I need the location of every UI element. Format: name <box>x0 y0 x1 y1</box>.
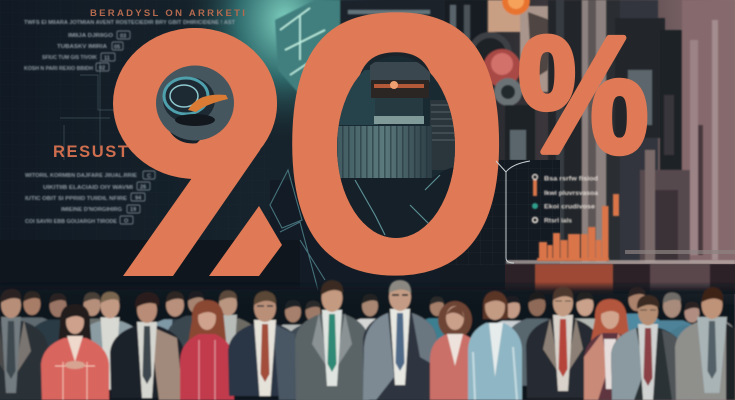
text block: lower list: O <box>124 218 129 224</box>
person: woman in coral jacket <box>41 304 109 400</box>
text block: lower list: 19 <box>130 207 136 213</box>
background row of people <box>1 287 720 392</box>
text block: upper list: 11 <box>104 56 110 62</box>
city towers on the right <box>548 0 735 262</box>
text block: lower list: 26 <box>140 184 146 190</box>
big number 9.0% <box>113 12 648 276</box>
legend: Ikwi pluvrsvasoa <box>544 190 599 197</box>
chart bracket line <box>496 161 530 263</box>
text block: lower list <box>25 171 155 225</box>
text block: upper list: TUBASKV IMIRIA <box>57 44 107 50</box>
person: man at right edge <box>675 287 735 400</box>
decimal point <box>209 206 282 276</box>
text block: upper list: KOSH N PARI REXIO BBIDH <box>24 66 93 72</box>
person: man with glasses and red tie <box>228 291 302 400</box>
text block: upper list: SFIUC TUM GIS TIVOIK <box>42 55 97 61</box>
person: man left edge <box>0 289 48 400</box>
text block: upper list: 05 <box>114 44 120 50</box>
person: man with green tie <box>295 280 369 400</box>
machine window in the 0 <box>337 56 455 238</box>
text block: upper list: 02 <box>99 66 105 72</box>
person: man in tan and black suit <box>110 292 184 400</box>
person: man in grey suit <box>611 295 685 400</box>
legend: Rtsrl ials <box>544 218 573 224</box>
text block: lower list: IUTIC OBIT SI PPRIID TUIIDIL NFIRE <box>25 196 127 202</box>
heading: market: BERADYSL ON ARRKETI <box>90 8 247 19</box>
9 diagonal leg <box>123 100 277 276</box>
robot machinery at top centre <box>275 0 552 165</box>
legend: Ekoi crudivose <box>544 204 596 210</box>
person: man with glasses and striped tie <box>363 280 437 400</box>
text block: lower list: WITORIL KORMBN DAJFARE JIIUAL.RRIE <box>25 173 137 179</box>
person: woman with red hair <box>584 299 636 400</box>
person: woman in crimson coat <box>180 300 234 400</box>
percent sign: % <box>518 3 649 188</box>
text block: lower list: C <box>147 174 151 180</box>
text block: upper list: IMIIJA DJRIIGO <box>68 33 114 39</box>
text block: lower list: IMIEINE D'NORGIHIRG <box>61 207 122 213</box>
person: woman in pale blue jacket <box>468 291 522 400</box>
bar chart <box>537 194 619 261</box>
text block: upper list <box>24 20 236 72</box>
legend <box>532 174 599 224</box>
legend: Bsa rsrfw fisiod <box>544 176 598 182</box>
heading: result: RESUST <box>53 143 130 161</box>
text block: upper list: 03 <box>120 34 126 40</box>
person: woman in pink jacket <box>430 301 482 400</box>
person: man in dark suit with red tie <box>526 287 600 398</box>
text block: lower list: COI SAVRI EBB GOIJARGH TIRODE <box>25 219 117 225</box>
text block: lower list: 94 <box>135 196 142 202</box>
lower mid dark wall <box>270 180 550 290</box>
text block: upper list: TWFS EI MIIARA JOTMIAN AVENT ROSTECIEDIR BRY GBIT DHIRICIDENE ! AST <box>24 20 236 26</box>
horizon and reflection <box>505 264 735 294</box>
emblem window in the 9 <box>156 66 234 140</box>
text block: lower list: UIKITIIB ELACIAID OIY WAVMI <box>43 185 133 191</box>
crowd of business people <box>0 280 735 400</box>
